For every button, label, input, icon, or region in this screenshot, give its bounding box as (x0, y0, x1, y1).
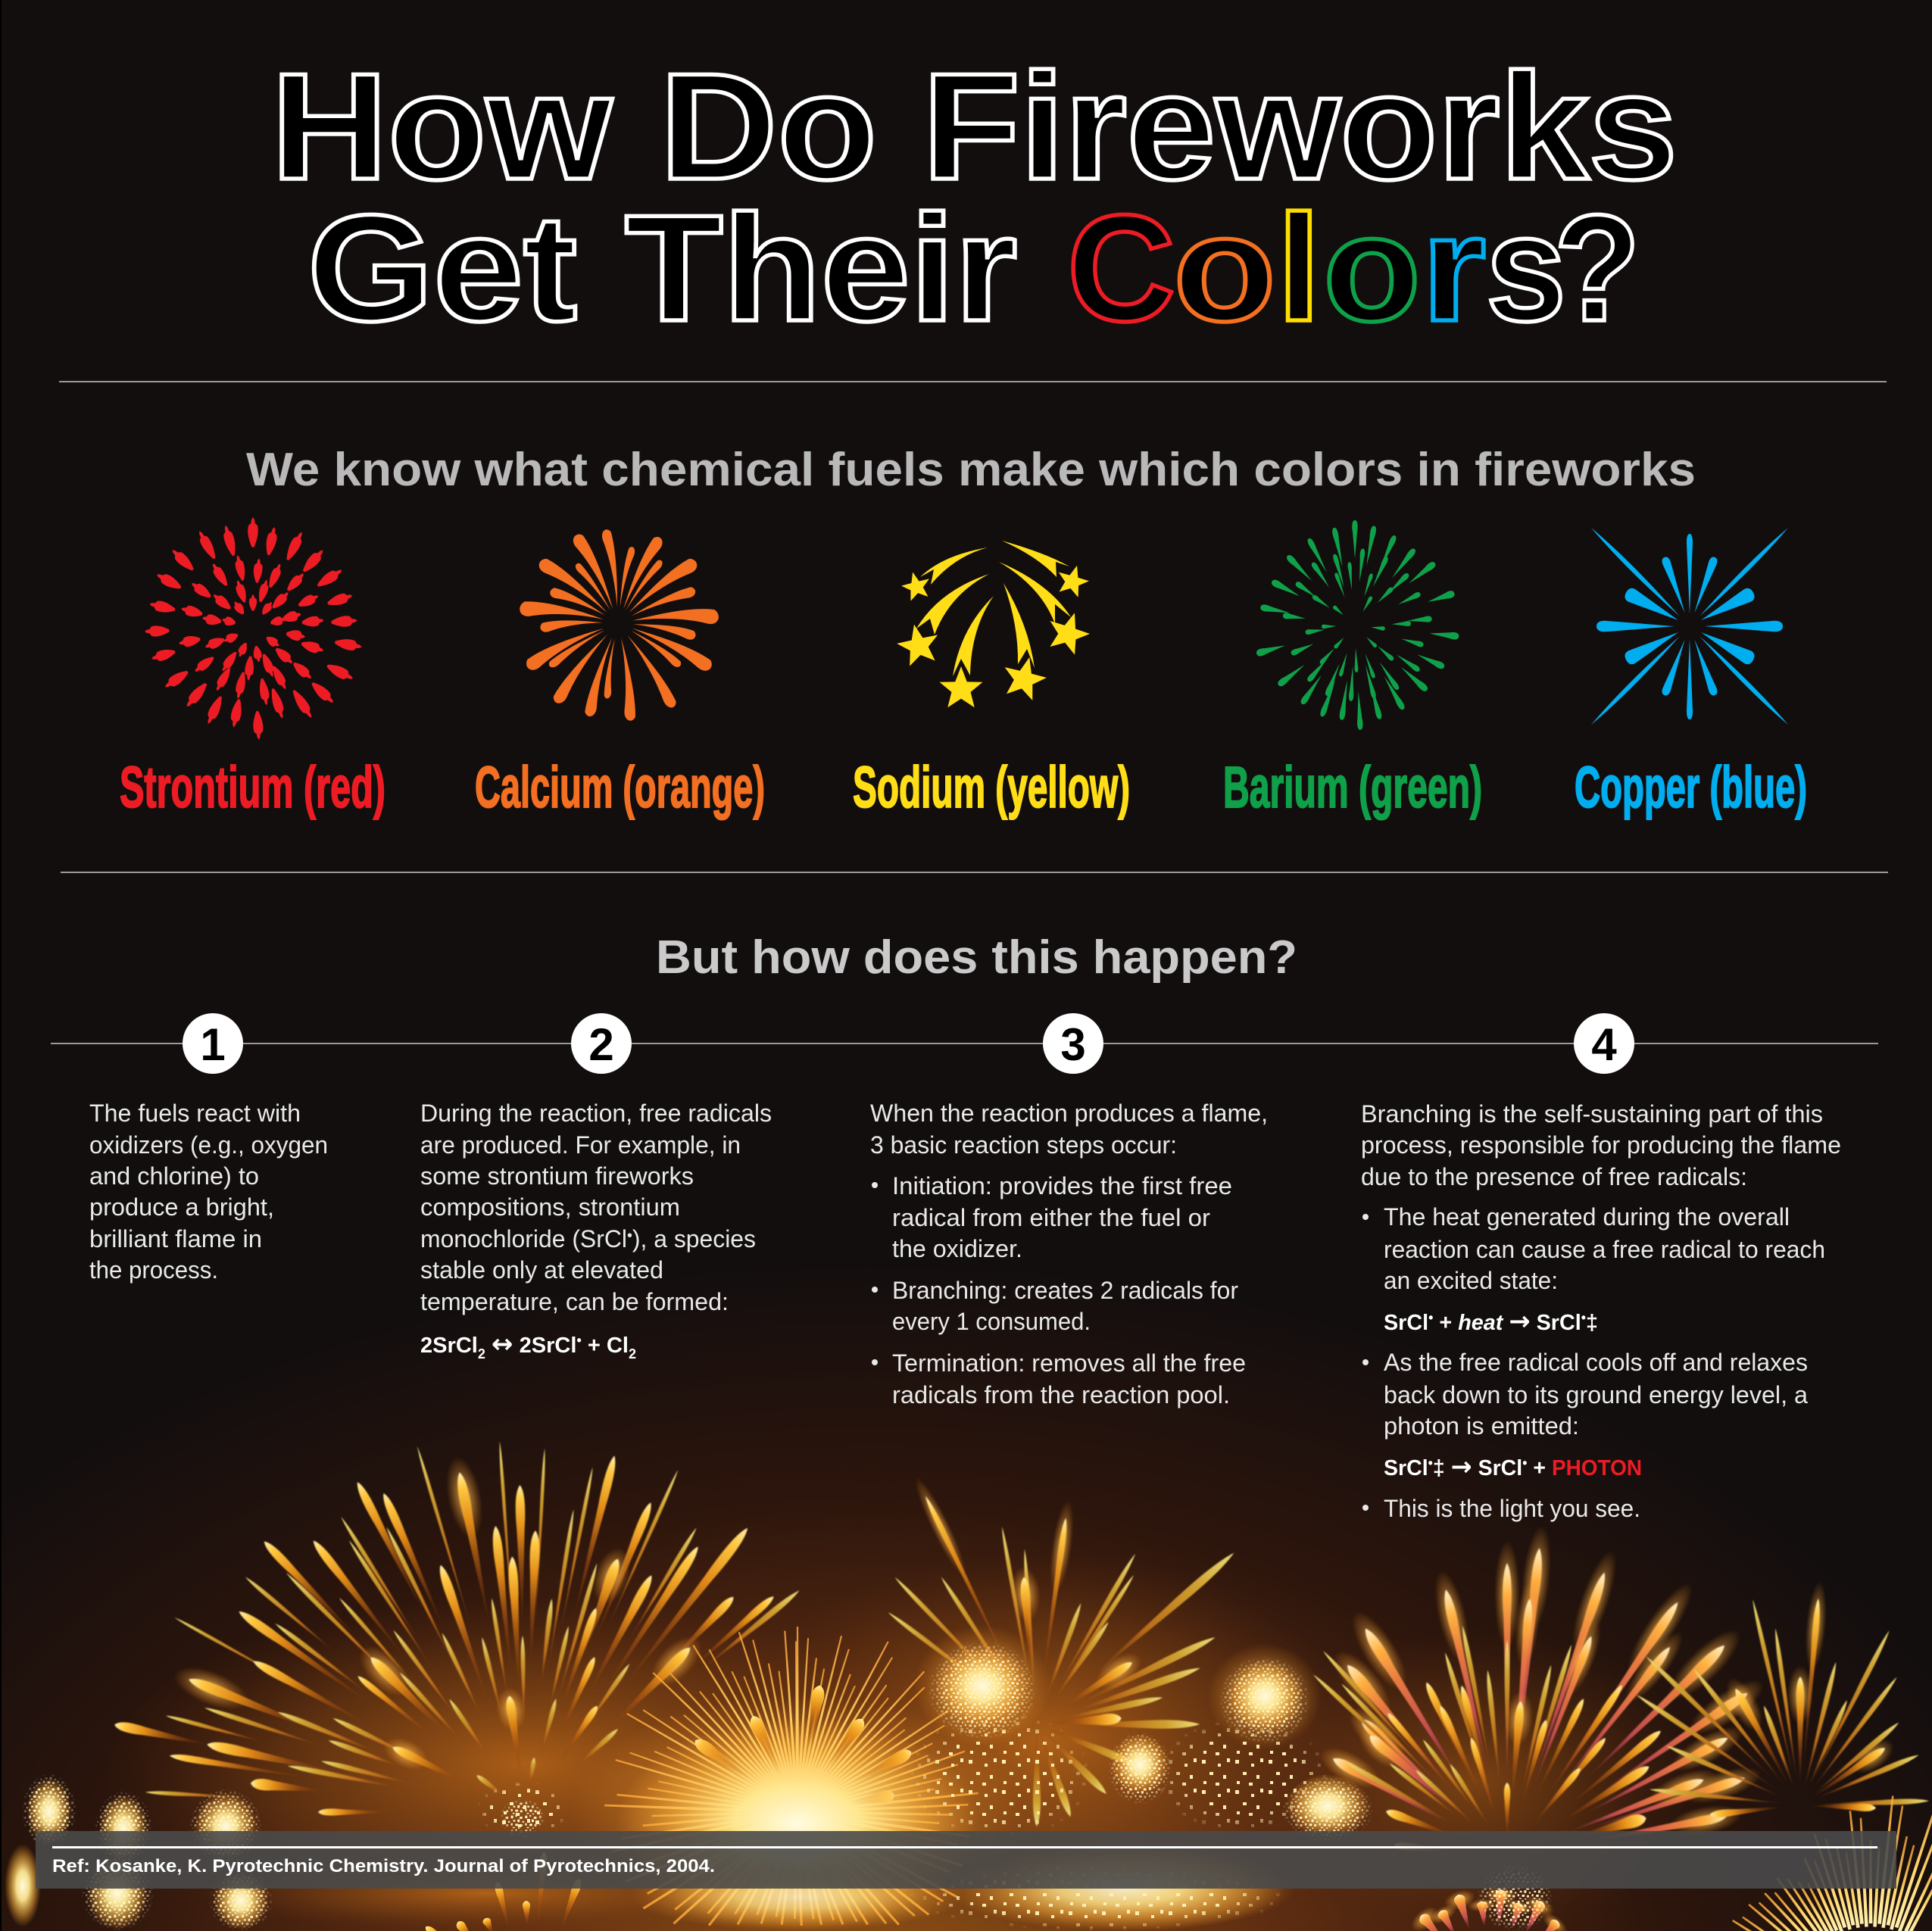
text: step 2: some strontium fireworks (420, 1162, 694, 1190)
text: step 4: → SrCl (1451, 1452, 1523, 1482)
text: step 4: This is the light you see. (1384, 1495, 1640, 1522)
title: Their (625, 184, 1017, 353)
text: step 4: • (1428, 1310, 1433, 1325)
text: step 4: an excited state: (1384, 1267, 1558, 1294)
text: step 4: The heat generated during the overall (1384, 1203, 1790, 1231)
text: step 2: compositions, strontium (420, 1193, 680, 1221)
text: step 2: • (627, 1228, 632, 1244)
text: step 2: stable only at elevated (420, 1256, 663, 1284)
text: step 2: During the reaction, free radicals (420, 1100, 772, 1127)
text: step 4: ‡ (1586, 1311, 1598, 1335)
step number 1 (183, 1013, 243, 1074)
text: step 1: brilliant flame in (89, 1225, 262, 1252)
text: step 3: radicals from the reaction pool. (892, 1381, 1230, 1408)
firework burst: large orange, left (114, 1441, 801, 1816)
step number 2 (571, 1013, 632, 1074)
firework burst: yellow streaks, centre right (887, 1474, 1237, 1826)
text: step 2: 2SrCl (420, 1334, 478, 1358)
title: C (1067, 184, 1175, 353)
label: Strontium: Strontium (red) (120, 755, 385, 820)
title: Fireworks (922, 42, 1678, 211)
text: step 4: process, responsible for producing the flame (1361, 1131, 1841, 1159)
text: step 4: reaction can cause a free radical to reach (1384, 1236, 1825, 1263)
text: step 4: • (1581, 1310, 1586, 1325)
title (271, 42, 1678, 353)
text: step 2: are produced. For example, in (420, 1131, 741, 1159)
sparkle clusters (5, 1626, 1553, 1931)
text: step 2: ↔ 2SrCl (492, 1329, 576, 1359)
text: step 2 (420, 1100, 772, 1362)
firework rays: lower edge (423, 1783, 1932, 1931)
step number 4: 4 (1591, 1019, 1617, 1070)
title: o (1323, 184, 1421, 353)
text: step 2: • (576, 1333, 582, 1348)
text: step 4: + (1433, 1311, 1458, 1335)
text: step 4: due to the presence of free radicals: (1361, 1163, 1747, 1190)
title: l (1277, 184, 1321, 353)
text: step 3: Initiation: provides the first free (892, 1172, 1232, 1199)
text: step 1: produce a bright, (89, 1193, 274, 1221)
text: step 4: photon is emitted: (1384, 1412, 1579, 1440)
text: step 4: PHOTON (1552, 1456, 1642, 1480)
title: o (1173, 184, 1276, 353)
text: step 2: 2 (629, 1346, 636, 1362)
step number 4 (1574, 1013, 1634, 1074)
text: step 4: heat → SrCl (1458, 1306, 1581, 1337)
text: step 3: 3 basic reaction steps occur: (870, 1131, 1177, 1159)
heading: how does this happen: But how does this happen? (656, 931, 1297, 984)
title: ? (1554, 184, 1640, 353)
text: step 1 (89, 1100, 328, 1284)
firework burst: pink and gold, right (1312, 1524, 1771, 1857)
icon: green firework (1256, 520, 1459, 730)
text: step 3: When the reaction produces a flame, (870, 1100, 1268, 1127)
text: step 2: monochloride (SrCl (420, 1225, 628, 1252)
firework burst: olive thin rays, far right (1635, 1580, 1929, 1819)
text: step 4: • (1522, 1455, 1527, 1471)
reference bar (36, 1831, 1896, 1889)
text: step 4: SrCl (1384, 1311, 1429, 1335)
text: step 4 (1361, 1100, 1841, 1522)
icon: orange firework (518, 529, 719, 722)
text: step 1: the process. (89, 1256, 218, 1284)
text: step 2: 2 (478, 1346, 485, 1362)
text: step 3: Termination: removes all the free (892, 1349, 1246, 1377)
text: step 2: temperature, can be formed: (420, 1288, 729, 1315)
heading: chemical fuels: We know what chemical fuels make which colors in fireworks (246, 444, 1696, 496)
step number 2: 2 (588, 1019, 614, 1070)
text: step 4: As the free radical cools off and relaxes (1384, 1349, 1808, 1376)
step number 3 (1043, 1013, 1103, 1074)
title: Do (660, 42, 877, 211)
title: s (1486, 184, 1566, 353)
text: step 4: ‡ (1433, 1456, 1451, 1480)
text: step 3 (870, 1100, 1268, 1408)
text: step 4: SrCl (1384, 1456, 1429, 1480)
label: Barium: Barium (green) (1223, 755, 1482, 820)
text: step 2: + Cl (582, 1334, 629, 1358)
text: step 3: radical from either the fuel or (892, 1204, 1210, 1231)
firework burst: dense yellow rays, centre (570, 1627, 1025, 1930)
reference bar: Ref: Kosanke, K. Pyrotechnic Chemistry. Journal of Pyrotechnics, 2004. (52, 1856, 715, 1876)
text: step 4: • (1428, 1455, 1433, 1471)
icon: yellow shooting stars (894, 541, 1094, 707)
title: Get (307, 184, 577, 353)
text: step 3: Branching: creates 2 radicals for (892, 1277, 1238, 1304)
title: r (1422, 184, 1486, 353)
text: step 2: ), a species (632, 1225, 756, 1252)
icon: blue firework (1590, 526, 1790, 726)
label: Sodium: Sodium (yellow) (853, 755, 1130, 820)
text: step 1: and chlorine) to (89, 1162, 259, 1190)
title: How (271, 42, 612, 211)
text: step 3: every 1 consumed. (892, 1308, 1091, 1335)
icon: red firework (145, 517, 363, 740)
text: step 1: The fuels react with (89, 1100, 301, 1127)
text: step 1: oxidizers (e.g., oxygen (89, 1131, 328, 1159)
text: step 4: + (1527, 1456, 1546, 1480)
text: step 3: the oxidizer. (892, 1235, 1022, 1262)
step number 3: 3 (1060, 1019, 1086, 1070)
text: step 4: Branching is the self-sustaining part of this (1361, 1100, 1823, 1128)
label: Calcium: Calcium (orange) (475, 755, 765, 820)
text: step 4: back down to its ground energy level, a (1384, 1381, 1808, 1408)
step number 1: 1 (200, 1019, 226, 1070)
